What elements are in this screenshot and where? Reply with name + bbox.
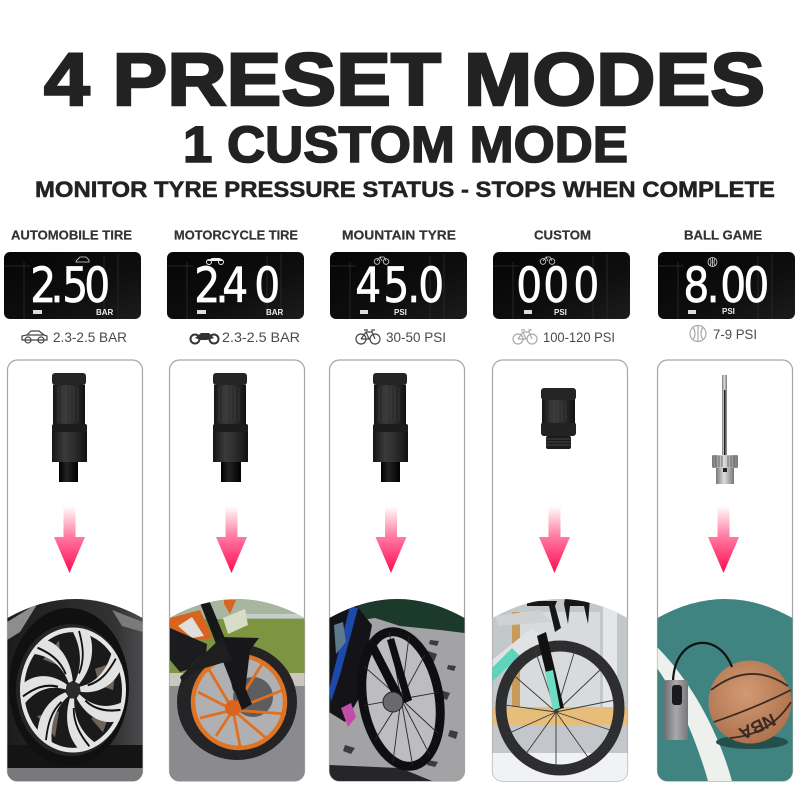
column: ball game — [657, 228, 795, 781]
label: motorcycle tire: MOTORCYCLE TIRE — [174, 228, 298, 242]
photo: road bike wheel — [492, 595, 628, 781]
card — [170, 360, 304, 781]
display: 2.40 bar: 2.40 — [194, 258, 280, 314]
photo: pump and basketball — [657, 595, 793, 781]
display: 2.50 bar — [4, 252, 141, 319]
column: mountain tyre — [329, 228, 467, 781]
display: 2.50 bar: BAR — [96, 308, 114, 317]
custom adapter — [541, 388, 576, 449]
range: 7-9 psi — [690, 326, 757, 342]
display: 000 psi — [493, 252, 630, 319]
display: 000 psi: 000 — [516, 258, 599, 314]
label: ball game: BALL GAME — [684, 228, 762, 242]
photo: car wheel — [7, 595, 143, 781]
display: 2.40 bar: BAR — [266, 308, 284, 317]
display: 000 psi: PSI — [554, 308, 567, 317]
card — [8, 360, 142, 781]
display: 2.50 bar: 2.50 — [30, 258, 110, 314]
arrow — [54, 506, 85, 573]
arrow — [216, 506, 247, 573]
display: 8.00 psi: 8.00 — [683, 258, 769, 314]
nozzle — [373, 373, 408, 482]
range: 7-9 psi: 7-9 PSI — [713, 327, 757, 342]
photo: pump and basketball: NBA — [736, 709, 779, 744]
range: 2.3-2.5 bar: 2.3-2.5 BAR — [53, 330, 127, 345]
range: 2.3-2.5 bar — [22, 330, 127, 345]
column: custom — [492, 228, 630, 781]
label: custom: CUSTOM — [534, 228, 591, 242]
range: 100-120 psi — [513, 330, 615, 345]
arrow — [708, 506, 739, 573]
label: mountain tyre: MOUNTAIN TYRE — [342, 228, 456, 242]
range: 2.3-2.5 bar — [190, 330, 300, 345]
label: automobile tire: AUTOMOBILE TIRE — [11, 228, 132, 242]
display: 45.0 psi: PSI — [394, 308, 407, 317]
tagline: MONITOR TYRE PRESSURE STATUS - STOPS WHEN COMPLETE — [35, 177, 775, 202]
title: 4 preset modes: 4 PRESET MODES — [44, 38, 765, 121]
card — [492, 360, 628, 781]
display: 45.0 psi: 45.0 — [355, 258, 444, 314]
display: 2.40 bar — [167, 252, 304, 319]
arrow — [376, 506, 406, 573]
nozzle — [213, 373, 248, 482]
card — [658, 360, 792, 781]
card — [330, 360, 464, 781]
range: 30-50 psi: 30-50 PSI — [386, 330, 446, 345]
display: 8.00 psi — [658, 252, 795, 319]
column: automobile tire — [4, 228, 143, 781]
photo: motorcycle wheel — [169, 595, 305, 781]
nozzle — [52, 373, 87, 482]
display: 45.0 psi — [330, 252, 467, 319]
range: 100-120 psi: 100-120 PSI — [543, 330, 615, 345]
range: 2.3-2.5 bar: 2.3-2.5 BAR — [222, 330, 300, 345]
inflation needle — [712, 375, 738, 484]
range: 30-50 psi — [356, 330, 446, 345]
column: motorcycle tire — [167, 228, 305, 781]
arrow — [539, 506, 570, 573]
subtitle: 1 custom mode: 1 CUSTOM MODE — [183, 116, 628, 173]
photo: mountain bike wheel — [329, 595, 465, 781]
display: 8.00 psi: PSI — [722, 307, 735, 316]
